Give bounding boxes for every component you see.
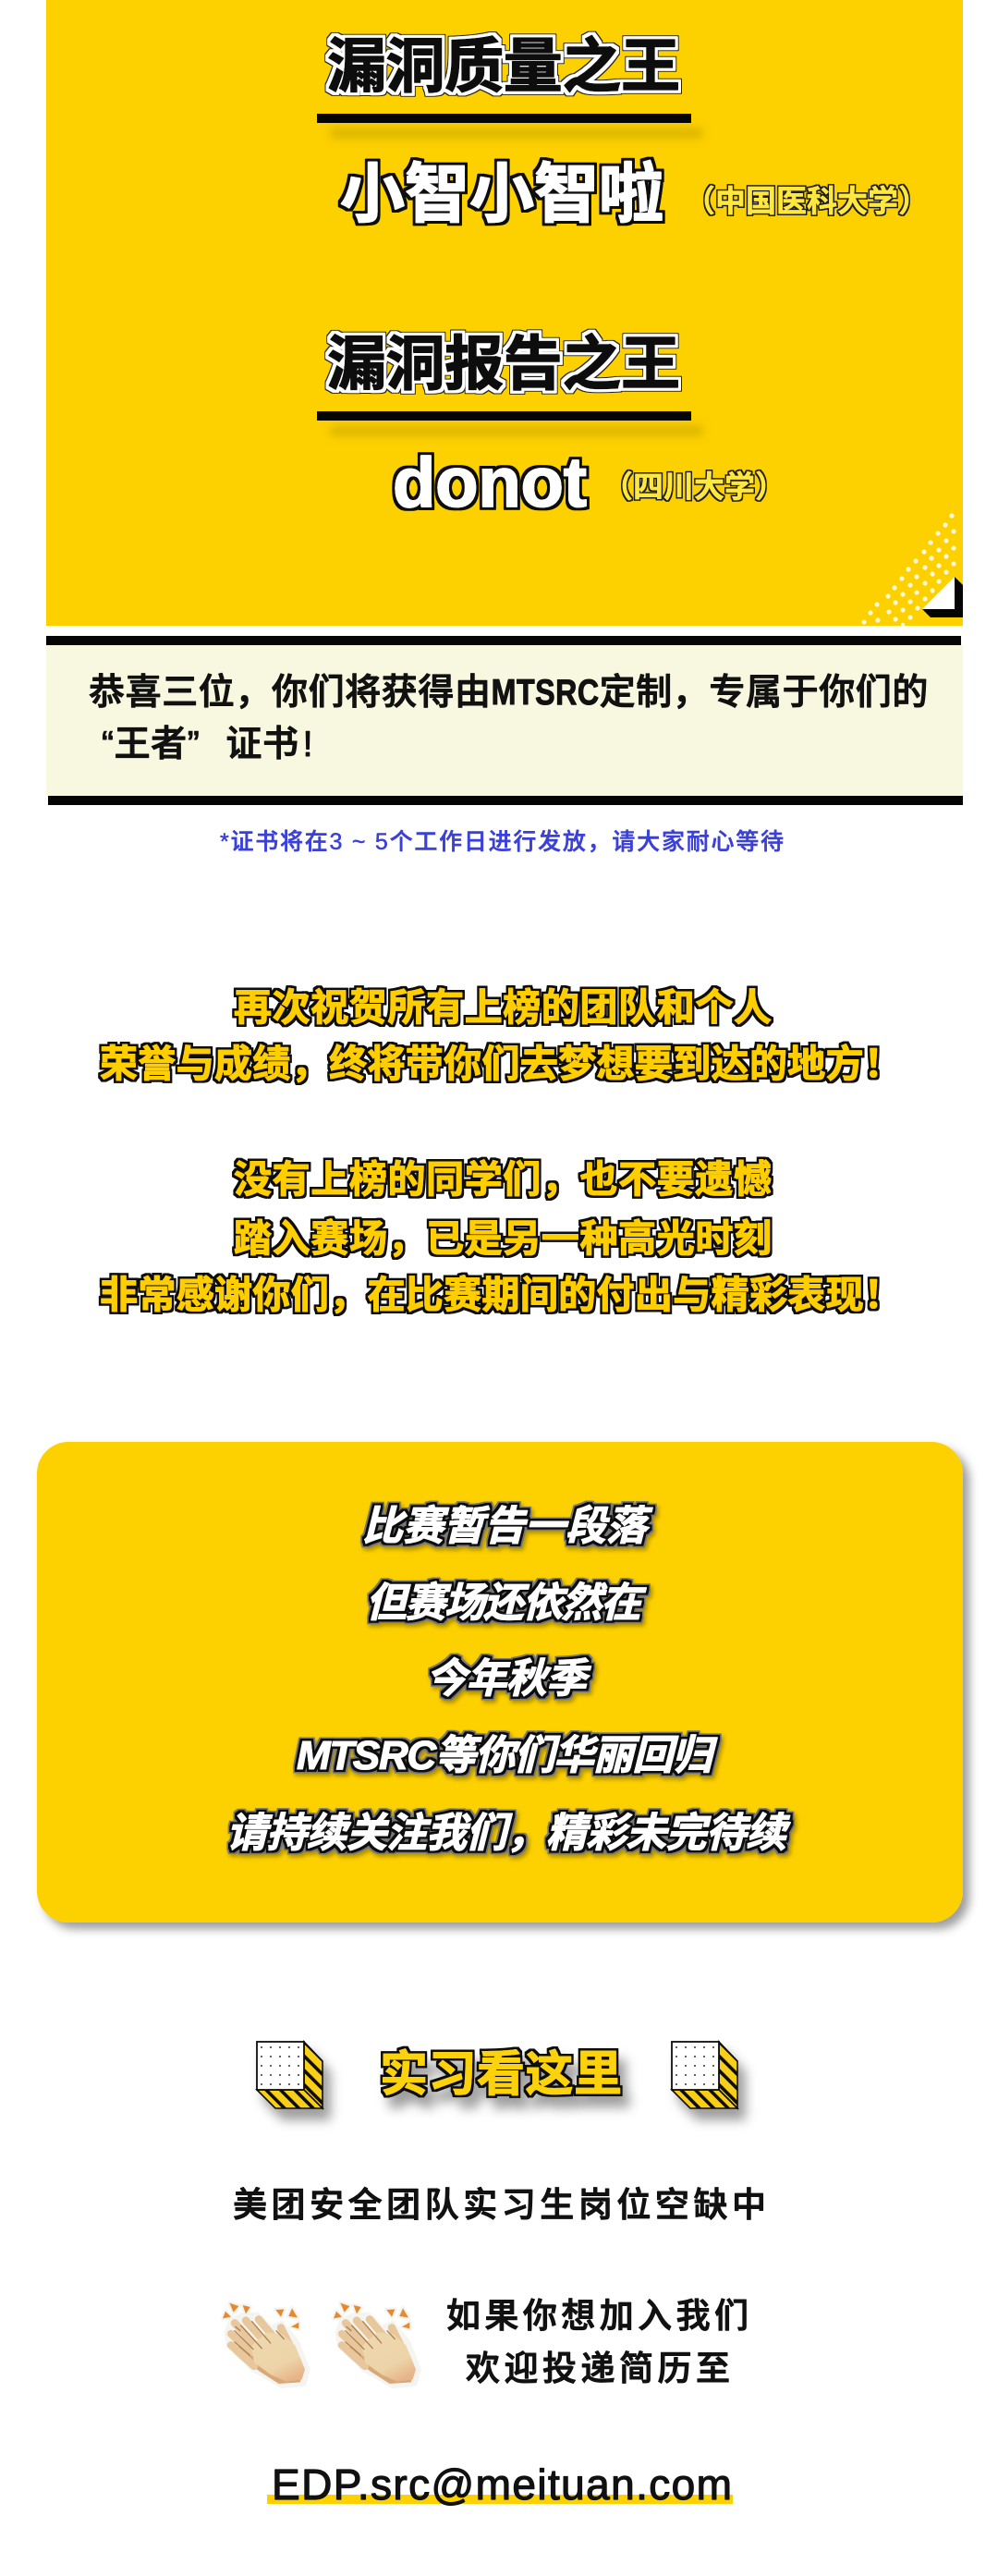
note: certificate delivery time: *证书将在3 ~ 5个工作日进行发放，请大家耐心等待 [220, 829, 784, 855]
text: join us invitation: 欢迎投递简历至 [466, 2350, 730, 2387]
icon: right dotted striped cube [672, 2042, 737, 2108]
email address with yellow underline: EDP.src@meituan.com [272, 2460, 732, 2509]
text block: congratulations message: 荣誉与成绩，终将带你们去梦想要到达的地方！ [100, 1043, 902, 1085]
text block: season return lines: 今年秋季 [426, 1656, 591, 1702]
text block: season return lines [226, 1504, 791, 1856]
divider: bug report king underline with shadow [317, 411, 702, 435]
text: join us invitation: 如果你想加入我们 [446, 2297, 748, 2335]
divider: bug quality king underline with shadow [317, 114, 702, 138]
text: join us invitation [446, 2297, 748, 2387]
icon: clapping hands right [334, 2303, 419, 2387]
icon: clapping hands left [223, 2303, 308, 2387]
certificate notice text [89, 673, 929, 764]
panel: certificate notice [46, 636, 963, 805]
text block: season return lines: 但赛场还依然在 [366, 1581, 647, 1626]
certificate notice text: 恭喜三位，你们将获得由MTSRC定制，专属于你们的 [89, 673, 929, 713]
text block: season return lines: MTSRC等你们华丽回归 [297, 1733, 718, 1778]
heading: bug quality king: 漏洞质量之王 [327, 33, 680, 100]
winner name: donot: donot [393, 444, 587, 522]
winner name: xiaozhi: 小智小智啦 [340, 158, 663, 230]
text block: congratulations message: 没有上榜的同学们，也不要遗憾 [234, 1158, 772, 1201]
text block: congratulations message [100, 986, 902, 1316]
text block: season return lines: 请持续关注我们，精彩未完待续 [226, 1811, 791, 1856]
heading: internship: 实习看这里 [380, 2048, 622, 2102]
text block: season return lines: 比赛暂告一段落 [362, 1504, 653, 1549]
certificate notice text: “王者” 证书! [102, 725, 313, 764]
heading: bug report king: 漏洞报告之王 [327, 331, 680, 397]
text: internship openings: 美团安全团队实习生岗位空缺中 [233, 2186, 766, 2224]
winner school: china medical university: （中国医科大学） [685, 184, 929, 218]
text block: congratulations message: 非常感谢你们，在比赛期间的付出与精彩表现！ [100, 1274, 902, 1316]
winner school: sichuan university: （四川大学） [602, 470, 785, 504]
panel: winners yellow background [46, 0, 963, 626]
icon: left dotted striped cube [257, 2042, 323, 2108]
text block: congratulations message: 再次祝贺所有上榜的团队和个人 [234, 986, 772, 1029]
panel: season return message [37, 1442, 963, 1923]
decoration: corner dots and folded triangle [861, 513, 963, 627]
text block: congratulations message: 踏入赛场，已是另一种高光时刻 [234, 1217, 772, 1260]
